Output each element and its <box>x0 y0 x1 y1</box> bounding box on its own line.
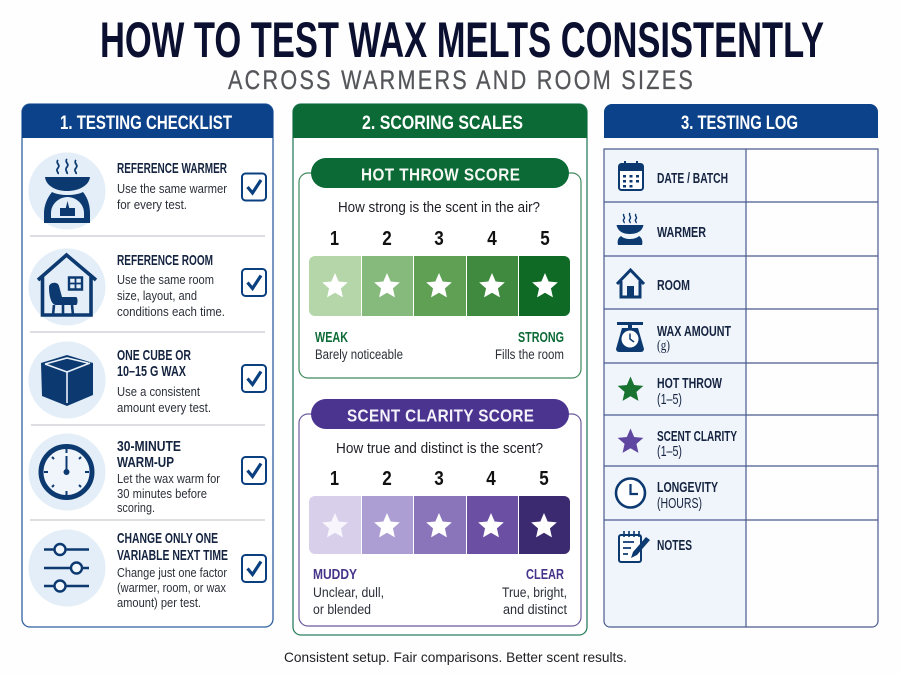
pill heading: HOT THROW SCORE <box>361 164 520 185</box>
text block: conditions each time. <box>117 304 225 319</box>
score numbers: 4 <box>487 228 497 250</box>
text block: Use the same warmer <box>117 181 228 196</box>
text block <box>117 252 225 319</box>
weak label <box>315 330 403 362</box>
text block: for every test. <box>117 197 187 212</box>
item: change one variable <box>28 530 266 610</box>
panel: testing checklist <box>22 104 273 627</box>
label <box>657 376 722 408</box>
row: longevity <box>616 478 718 512</box>
icon: small warmer <box>616 213 644 245</box>
checklist header <box>22 104 273 138</box>
clear label: and distinct <box>503 602 567 617</box>
muddy label: Unclear, dull, <box>313 585 384 600</box>
score numbers: 5 <box>539 468 549 490</box>
label: (g) <box>657 338 670 354</box>
scoring header: 2. SCORING SCALES <box>362 112 523 134</box>
label: HOT THROW <box>657 376 722 392</box>
score numbers: 3 <box>434 228 444 250</box>
checkbox <box>242 174 266 200</box>
score bar <box>309 256 570 316</box>
score numbers <box>330 228 550 250</box>
question: How strong is the scent in the air? <box>338 199 540 216</box>
icon: sliders <box>28 530 106 606</box>
score numbers <box>330 468 549 490</box>
strong label: STRONG <box>518 330 564 346</box>
checkbox <box>242 269 266 296</box>
text block: Let the wax warm for <box>117 471 221 486</box>
log table <box>604 149 878 627</box>
row: room <box>617 270 690 297</box>
label: LONGEVITY <box>657 480 718 496</box>
pill heading: SCENT CLARITY SCORE <box>347 405 534 426</box>
text block: 30 minutes before <box>117 486 207 501</box>
text block <box>117 160 228 212</box>
muddy label: MUDDY <box>313 567 357 583</box>
pill heading <box>311 399 569 429</box>
text block: 10–15 G WAX <box>117 363 186 380</box>
clear label: CLEAR <box>526 567 564 583</box>
label: (1–5) <box>657 392 682 408</box>
icon: calendar <box>619 161 643 190</box>
row: date / batch: DATE / BATCH <box>657 171 728 187</box>
panel: testing log <box>604 104 878 627</box>
item: warm-up <box>28 434 266 515</box>
log header: 3. TESTING LOG <box>681 112 798 134</box>
text block: REFERENCE ROOM <box>117 252 213 269</box>
icon: warmer <box>28 152 106 230</box>
weak label: WEAK <box>315 330 348 346</box>
pill heading <box>311 158 569 188</box>
card: hot throw score <box>299 158 581 378</box>
text block: Use a consistent <box>117 384 200 399</box>
icon: wax cube <box>28 342 106 418</box>
row: warmer: WARMER <box>657 225 706 241</box>
text block: Change just one factor <box>117 565 228 580</box>
checklist header: 1. TESTING CHECKLIST <box>60 112 232 134</box>
text block: ONE CUBE OR <box>117 347 191 364</box>
subtitle: ACROSS WARMERS AND ROOM SIZES <box>228 66 693 96</box>
footer tagline: Consistent setup. Fair comparisons. Better scent results. <box>284 649 627 665</box>
label: (HOURS) <box>657 496 702 512</box>
score numbers: 4 <box>486 468 496 490</box>
log header <box>604 104 878 138</box>
row: wax amount <box>616 322 731 354</box>
card: scent clarity score <box>299 399 581 626</box>
row: scent clarity <box>618 428 737 460</box>
panel: scoring scales <box>293 104 587 635</box>
text block: amount every test. <box>117 400 211 415</box>
icon: clock <box>616 478 645 508</box>
text block <box>117 530 228 610</box>
checkbox <box>242 457 266 484</box>
text block: (warmer, room, or wax <box>117 580 226 595</box>
text block: WARM-UP <box>117 454 174 471</box>
clear label <box>502 567 567 617</box>
row: date / batch <box>619 161 728 190</box>
score numbers: 1 <box>330 228 339 250</box>
muddy label: or blended <box>313 602 371 617</box>
text block <box>117 438 221 515</box>
checkbox <box>242 555 266 582</box>
question: How true and distinct is the scent? <box>336 440 543 457</box>
text block: REFERENCE WARMER <box>117 160 227 177</box>
row: warmer <box>616 213 706 245</box>
icon: room <box>28 248 106 326</box>
text block: VARIABLE NEXT TIME <box>117 547 228 564</box>
item: one cube <box>28 342 266 418</box>
score numbers: 5 <box>540 228 550 250</box>
item: reference warmer <box>28 152 266 230</box>
text block: scoring. <box>117 500 155 515</box>
label <box>657 324 731 354</box>
checkbox <box>242 365 266 392</box>
muddy label <box>313 567 384 617</box>
score bar <box>309 496 570 554</box>
row: notes: NOTES <box>657 538 692 554</box>
icon: scale <box>616 322 644 352</box>
text block: amount) per test. <box>117 595 201 610</box>
row: room: ROOM <box>657 278 690 294</box>
item: reference room <box>28 248 266 326</box>
icon: notepad <box>619 531 650 562</box>
row: hot throw <box>618 376 722 408</box>
icon: clock <box>28 434 106 510</box>
strong label: Fills the room <box>495 347 564 362</box>
icon: green star <box>618 376 643 401</box>
weak label: Barely noticeable <box>315 347 403 362</box>
label <box>657 480 718 512</box>
clear label: True, bright, <box>502 585 567 600</box>
score numbers: 2 <box>382 228 392 250</box>
label: SCENT CLARITY <box>657 429 737 445</box>
label: (1–5) <box>657 444 682 460</box>
row: notes <box>619 531 692 562</box>
score numbers: 2 <box>382 468 392 490</box>
label: WAX AMOUNT <box>657 324 731 340</box>
text block: size, layout, and <box>117 288 197 303</box>
icon: purple star <box>618 428 643 453</box>
text block: 30-MINUTE <box>117 438 181 455</box>
icon: house <box>617 270 644 297</box>
strong label <box>495 330 564 362</box>
score numbers: 1 <box>330 468 339 490</box>
text block: Use the same room <box>117 272 214 287</box>
label <box>657 429 737 460</box>
text block: CHANGE ONLY ONE <box>117 530 218 547</box>
text block <box>117 347 211 415</box>
score numbers: 3 <box>434 468 444 490</box>
scoring header <box>293 104 587 138</box>
